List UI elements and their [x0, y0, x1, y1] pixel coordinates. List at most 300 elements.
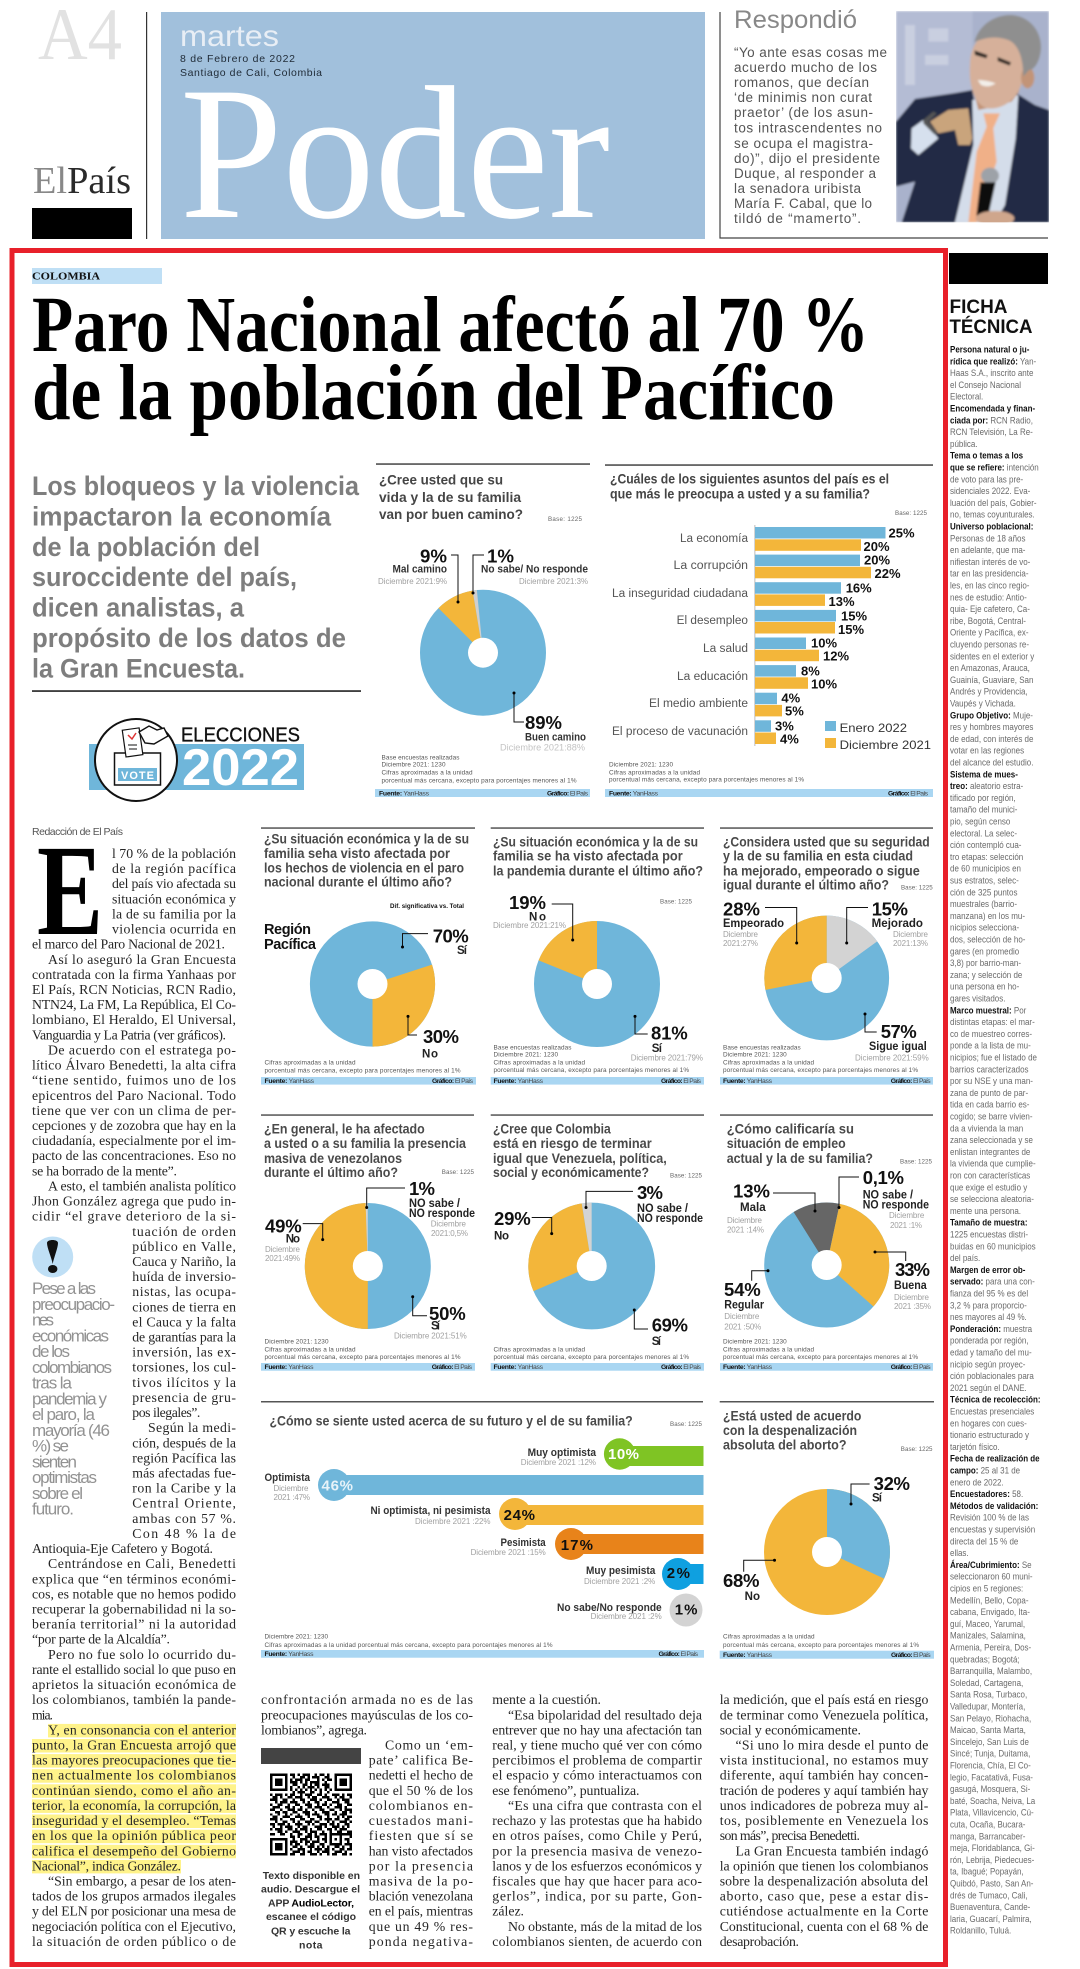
- black block right: [949, 253, 1048, 284]
- text block: ficha técnica details: 1225 encuestas distri-: [950, 1229, 1028, 1240]
- article column 3: entrever que no hay una afectación tan: [492, 1722, 702, 1737]
- red frame: [12, 250, 946, 1964]
- chart: venezolanos: [261, 1114, 475, 1371]
- text block: ficha técnica details: Andrés y Providencia,: [950, 686, 1028, 697]
- text block: ficha técnica details: tarjetón físico.: [950, 1441, 1000, 1452]
- text block: ficha técnica details: edad y tamaño del mu-: [950, 1347, 1032, 1358]
- article column 1: se ha borrado de la mente”.: [32, 1163, 177, 1178]
- chart: pandemia: Gráfico: El País: [661, 1078, 702, 1085]
- headline: Paro Nacional afectó al 70 %: [32, 282, 869, 369]
- text block: ficha técnica details: tamaño del munici-: [950, 804, 1018, 815]
- panel: Respondió quote: praetor’ (de los asun-: [734, 105, 873, 120]
- value labels: 15%: [841, 609, 867, 624]
- chart: venezolanos: Cifras aproximadas a la unidad: [264, 1347, 356, 1354]
- text block: ficha técnica details: Buenaventura, Cande-: [950, 1902, 1030, 1912]
- value labels: 12%: [823, 649, 849, 664]
- chart: pandemia: Fuente: YanHass: [494, 1078, 544, 1085]
- article column 4: la medición, que el país está en riesgo: [720, 1692, 928, 1707]
- chart: venezolanos: 1%: [409, 1178, 435, 1199]
- panel: Respondió quote: María F. Cabal, que lo: [734, 196, 872, 211]
- article column 4: son más”, precisa Benedetti.: [720, 1828, 860, 1843]
- chart: empleo: Cifras aproximadas a la unidad: [723, 1347, 814, 1354]
- heading: Ficha técnica: TÉCNICA: [950, 316, 1033, 338]
- callout: exclamation icon: [32, 1236, 73, 1278]
- article column 3: ese fenómeno”, puntualiza.: [492, 1783, 640, 1798]
- text block: ficha técnica details: de voto para las pre-: [950, 474, 1023, 484]
- bar: optimista: Diciembre: [274, 1484, 309, 1493]
- chart: seguridad: porcentual más cercana, excepto para porcentajes menores al 1%: [723, 1067, 918, 1074]
- article column 1: nistas, las ocupa-: [132, 1284, 236, 1299]
- article column 1: más afectadas fue-: [132, 1466, 236, 1480]
- article column 1: Nacional”, indica González.: [32, 1858, 181, 1873]
- chart: empleo: 13%: [733, 1180, 770, 1202]
- chart: futuro lollipop bars: Diciembre 2021: 1230: [264, 1634, 328, 1641]
- text block: ficha técnica details: Revisión 100 % de las: [950, 1512, 1030, 1523]
- text block: ficha técnica details: en Amazonas, Arauca,: [950, 663, 1030, 673]
- article column 3: rechazo y las protestas que ha habido: [492, 1813, 702, 1828]
- text block: ficha técnica details: Técnica de recolección:: [950, 1394, 1041, 1405]
- audio note under QR: escanee el código: [266, 1911, 356, 1923]
- article column 1: presencia de gru-: [132, 1390, 236, 1405]
- chart: riesgo Venezuela: NO sabe /: [637, 1203, 689, 1215]
- value labels: 10%: [811, 636, 837, 651]
- chart: buen camino pie: Fuente: YanHass: [379, 790, 430, 798]
- bar: no sabe: No sabe/No responde: [557, 1602, 662, 1614]
- chart: despenalización aborto: 32%: [874, 1473, 910, 1494]
- article column 1: lombiano, El Heraldo, El Universal,: [32, 1012, 236, 1027]
- question: con la despenalización: [723, 1423, 857, 1438]
- article column 1: beranía territorial” ni la autoridad: [32, 1617, 236, 1632]
- callout text: %) se: [32, 1436, 69, 1456]
- text block: ficha técnica details: legio, Facatativá, Fusa-: [950, 1772, 1033, 1782]
- callout text: preocupacio-: [32, 1295, 115, 1314]
- article column 2: que un 49 % res-: [369, 1919, 473, 1934]
- text block: ficha técnica details: guí, Maceo, Yarumal,: [950, 1618, 1025, 1629]
- chart: buen camino pie: Mal camino: [392, 564, 447, 576]
- text block: ficha técnica details: Medellín, Bello, Copa-: [950, 1595, 1029, 1605]
- text block: ficha técnica details: Quibdó, Pasto, San An-: [950, 1878, 1034, 1889]
- chart: pandemia: Diciembre 2021:21%: [493, 921, 566, 930]
- text block: ficha técnica details: cuta, Ocaña, Bucara-: [950, 1819, 1026, 1830]
- callout text: tras la: [32, 1374, 73, 1392]
- chart: futuro lollipop bars: Cifras aproximadas a la unidad porcentual más cercana, excepto para porcentajes menores al 1%: [264, 1642, 553, 1649]
- drop cap E: E: [37, 819, 103, 963]
- article column 3: “Es una cifra que contrasta con el: [508, 1798, 702, 1813]
- chart: asuntos bar chart: Diciembre 2021: 1230: [609, 762, 673, 769]
- article column 1: El País, RCN Noticias, RCN Radio,: [32, 982, 236, 997]
- bar: ni optimista ni pesimista: [370, 1498, 704, 1530]
- bar: muy pesimista: Diciembre 2021 :2%: [584, 1577, 655, 1586]
- question: actual y la de su familia?: [727, 1151, 873, 1166]
- article column 1: situación económica y: [112, 891, 236, 906]
- chart: empleo: 54%: [724, 1279, 761, 1300]
- text block: ficha técnica details: ta, Ibagué; Popayán,: [950, 1866, 1024, 1877]
- value labels: 10%: [811, 677, 837, 692]
- article column 1: explica que “en términos económi-: [32, 1571, 236, 1586]
- category labels: [612, 533, 749, 738]
- bar: muy optimista: [521, 1438, 704, 1470]
- article column 1: contratada con la firma Yanhaas por: [32, 967, 236, 982]
- text block: ficha técnica details: San Pelayo, Riohacha,: [950, 1713, 1031, 1723]
- article column 4: vista institucional, no estamos muy: [720, 1753, 928, 1768]
- chart: riesgo Venezuela: Fuente: YanHass: [494, 1364, 544, 1371]
- value labels: 22%: [874, 566, 901, 581]
- callout text: pandemia y: [32, 1389, 108, 1408]
- chart: asuntos bar chart: [605, 464, 933, 798]
- text block: ficha técnica details: laria, Guacarí, Palmira,: [950, 1913, 1032, 1924]
- text block: ficha técnica details: Persona natural o ju-: [950, 344, 1030, 355]
- text block: ficha técnica details: manga, Barrancaber-: [950, 1831, 1026, 1841]
- chart: empleo: [720, 1114, 933, 1371]
- article column 1: Con 48 % la de: [132, 1526, 236, 1541]
- question: está en riesgo de terminar: [493, 1136, 652, 1151]
- chart: empleo: porcentual más cercana, excepto para porcentajes menores al 1%: [723, 1354, 918, 1361]
- text block: ficha técnica details: rídica que realizó: Yan-: [950, 356, 1036, 366]
- text block: ficha técnica details: Métodos de validación:: [950, 1500, 1038, 1511]
- pie: [333, 945, 412, 1023]
- text block: ficha técnica details: meja, Floridablanca, Gi-: [950, 1843, 1035, 1853]
- QR code: [270, 1774, 352, 1856]
- subheading: impactaron la economía: [32, 501, 332, 531]
- article column 2: lombianos”, agrega.: [261, 1722, 367, 1737]
- chart: empleo: 2021 :14%: [727, 1225, 764, 1234]
- chart: pandemia: porcentual más cercana, excepto para porcentajes menores al 1%: [494, 1067, 689, 1074]
- text block: ficha técnica details: sidentes en el exterior y: [950, 651, 1035, 661]
- text block: ficha técnica details: Personas de 18 años: [950, 533, 1026, 543]
- article column 4: de terminar como Venezuela política,: [720, 1707, 928, 1722]
- question: ¿Su situación económica y la de su: [493, 834, 698, 849]
- article column 1: terior, la economía, la corrupción, la: [32, 1798, 236, 1813]
- audio note under QR: Texto disponible en: [263, 1870, 360, 1882]
- question: ¿Considera usted que su seguridad: [723, 834, 930, 849]
- text block: ficha técnica details: Grupo Objetivo: Muje-: [950, 710, 1033, 720]
- chart: seguridad: Base: 1225: [901, 884, 933, 892]
- article column 1: la de su familia por la: [112, 906, 236, 921]
- text block: ficha técnica details: ción contempló cua-: [950, 840, 1022, 850]
- chart: seguridad: Empeorado: [723, 918, 784, 930]
- section banner: Poder: Poder: [180, 49, 610, 259]
- text block: ficha técnica details: Ponderación: muestra: [950, 1323, 1032, 1334]
- headline: [32, 282, 869, 437]
- article column 1: pos ilegales”.: [132, 1405, 200, 1420]
- chart: buen camino pie: Cifras aproximadas a la unidad: [382, 770, 473, 777]
- chart: buen camino pie: porcentual más cercana, excepto para porcentajes menores al 1%: [382, 778, 577, 785]
- text block: ficha técnica details: tificado por región,: [950, 792, 1016, 803]
- chart: venezolanos: NO sabe /: [409, 1198, 461, 1210]
- chart: pandemia: Diciembre 2021: 1230: [494, 1052, 558, 1059]
- article column 1: epicentros del Paro Nacional. Todo: [32, 1088, 236, 1103]
- question: [264, 832, 469, 889]
- bar: muy pesimista: [584, 1558, 704, 1590]
- value labels: 13%: [828, 594, 855, 609]
- section banner: Poder: Santiago de Cali, Colombia: [180, 67, 322, 79]
- text block: ficha técnica details: sidenciales 2022. Eva-: [950, 486, 1030, 496]
- text block: ficha técnica details: que exige el estudio y: [950, 1182, 1028, 1192]
- text block: ficha técnica details: quebradas; Bogotá;: [950, 1654, 1020, 1664]
- chart: despenalización aborto: [720, 1401, 934, 1659]
- article column 3: el espacio y cómo interactuamos con: [492, 1768, 702, 1783]
- chart: despenalización aborto: Cifras aproximadas a la unidad: [723, 1634, 815, 1641]
- chart: seguridad: Diciembre: [723, 930, 759, 939]
- article column 1: rante el estallido social lo que puso en: [32, 1662, 236, 1677]
- article column 1: Así lo aseguró la Gran Encuesta: [48, 952, 236, 967]
- text block: ficha técnica details: Roldanillo, Tuluá.: [950, 1925, 1011, 1936]
- chart: futuro lollipop bars: Gráfico: El País: [658, 1651, 699, 1658]
- chart: futuro lollipop bars: [261, 1401, 704, 1658]
- text block: ficha técnica details: Área/Cubrimiento: Se: [950, 1559, 1032, 1570]
- text block: ficha técnica details: nes mayores al 49 %.: [950, 1312, 1027, 1322]
- article column 1: tivos ilícitos y la: [132, 1375, 236, 1390]
- chart: empleo: NO responde: [863, 1200, 929, 1212]
- pie: [550, 1224, 633, 1308]
- text block: ficha técnica details: ellas.: [950, 1548, 969, 1558]
- article column 2: nedetti el hecho de: [369, 1768, 473, 1783]
- article column 3: mente a la cuestión.: [492, 1692, 601, 1707]
- chart: asuntos bar chart: Cifras aproximadas a la unidad: [609, 770, 700, 777]
- article column 3: en otros países, como Chile y Perú,: [492, 1828, 702, 1843]
- chart: seguridad: 2021:13%: [893, 939, 928, 948]
- bar: pesimista: 17%: [561, 1537, 593, 1554]
- article column 4: sobre la despenalización absoluta del: [720, 1874, 929, 1888]
- panel: Respondió quote: ‘de minimis non curat: [734, 90, 872, 105]
- text block: ficha técnica details: Sistema de mues-: [950, 769, 1018, 779]
- chart: empleo: Mala: [740, 1202, 766, 1214]
- text block: ficha técnica details: se selecciona aleatoria-: [950, 1194, 1034, 1204]
- text block: ficha técnica details: no, temas coyunturales.: [950, 509, 1035, 520]
- article column 4: social y económicamente.: [720, 1722, 861, 1737]
- article column 1: “por parte de la Alcaldía”.: [32, 1632, 170, 1647]
- article column 1: y del ELN por posicionar una mesa de: [32, 1904, 236, 1919]
- text block: ficha técnica details: nes de estudio: Antio-: [950, 592, 1027, 602]
- article column 2: colombianos en-: [369, 1798, 473, 1813]
- text block: ficha técnica details: ción poblacionales para: [950, 1371, 1034, 1381]
- audio note under QR: [261, 1870, 360, 1951]
- text block: ficha técnica details: Sincelejo, San Luis de: [950, 1736, 1029, 1747]
- bar: muy optimista: Muy optimista: [528, 1447, 597, 1459]
- text block: ficha técnica details: zana seleccionada y se: [950, 1135, 1033, 1145]
- chart: despenalización aborto: Sí: [872, 1493, 883, 1505]
- chart: riesgo Venezuela: 3%: [637, 1182, 663, 1203]
- article column 1: Centrándose en Cali, Benedetti: [48, 1556, 236, 1571]
- text block: ficha técnica details: cogido; se barre vivien-: [950, 1111, 1033, 1122]
- text block: ficha técnica details: de 60 municipios en: [950, 863, 1021, 874]
- bar: pesimista: [471, 1528, 704, 1560]
- question: masiva de venezolanos: [264, 1151, 402, 1166]
- value labels: 25%: [888, 526, 915, 541]
- bar: muy optimista: 10%: [608, 1446, 639, 1463]
- text block: ficha técnica details: gares visitados.: [950, 993, 1005, 1004]
- legend: Enero 2022: [840, 721, 907, 735]
- chart: empleo: Base: 1225: [900, 1158, 933, 1166]
- question: y la de su familia en esta ciudad: [723, 849, 913, 864]
- question: [379, 472, 523, 522]
- value labels: 8%: [801, 664, 820, 679]
- callout text: [32, 1279, 115, 1518]
- pie: [438, 608, 528, 697]
- pie: [784, 1222, 870, 1308]
- text block: ficha técnica details: Valledupar, Montería,: [950, 1701, 1025, 1712]
- text block: ficha técnica details: drés de Tumaco, Cali,: [950, 1890, 1028, 1900]
- text block: ficha técnica details: nicipios selecciona-: [950, 922, 1019, 933]
- bar: optimista: 46%: [322, 1478, 353, 1495]
- question: situación de empleo: [727, 1136, 846, 1151]
- text block: ficha técnica details: Encuestadores: 58.: [950, 1489, 1023, 1499]
- text block: ficha técnica details: tida en cada barrio es-: [950, 1099, 1030, 1110]
- question: a usted o a su familia la presencia: [264, 1136, 467, 1151]
- logo: Elecciones 2022: [89, 719, 304, 801]
- blue bars: [755, 527, 886, 732]
- article column 4: unos indicadores de pobreza muy al-: [720, 1798, 929, 1813]
- bar: ni optimista ni pesimista: Diciembre 2021 :22%: [415, 1517, 490, 1526]
- chart: seguridad: 28%: [723, 899, 760, 920]
- callout text: económicas: [32, 1326, 109, 1345]
- text block: ficha técnica details: nicipios; fue el listado de: [950, 1052, 1037, 1063]
- chart: empleo: Diciembre: [889, 1211, 925, 1220]
- chart: buen camino pie: Diciembre 2021:9%: [378, 577, 447, 586]
- chart: pandemia: Base encuestas realizadas: [494, 1044, 572, 1052]
- pie: [335, 1233, 400, 1299]
- subheading: suroccidente del país,: [32, 562, 297, 592]
- text block: ficha técnica details: Tamaño de muestra:: [950, 1217, 1028, 1228]
- text block: ficha técnica details: tro etapas: selección: [950, 851, 1023, 862]
- article column 1: la situación de orden público o de: [32, 1934, 236, 1949]
- panel: Respondió quote: la senadora uribista: [734, 181, 861, 196]
- callout text: futuro.: [32, 1500, 74, 1518]
- chart: venezolanos: Diciembre: [265, 1245, 301, 1254]
- chart: seguridad: Sigue igual: [869, 1041, 927, 1053]
- article column 4: tración de poderes y aquí también hay: [720, 1783, 928, 1798]
- text block: ficha técnica details: en hogares con cues-: [950, 1418, 1027, 1428]
- chart: seguridad: Diciembre: [893, 930, 929, 939]
- text block: ficha técnica details: ribe, Bogotá, Central-: [950, 615, 1026, 626]
- chart: asuntos bar chart: porcentual más cercana, excepto para porcentajes menores al 1%: [609, 777, 804, 784]
- chart: buen camino pie: Buen camino: [525, 732, 586, 744]
- chart: empleo: Regular: [724, 1300, 764, 1312]
- article column 1: público en Valle,: [132, 1239, 236, 1254]
- article column 2: masiva de la po-: [369, 1874, 473, 1888]
- text block: ficha técnica details: gares (en promedio: [950, 946, 1019, 956]
- callout text: optimistas: [32, 1468, 97, 1487]
- text block: ficha técnica details: gasugá, Mosquera, Si-: [950, 1784, 1030, 1794]
- category labels: La corrupción: [674, 560, 748, 572]
- chart: empleo: Gráfico: El País: [891, 1364, 931, 1371]
- chart: venezolanos: Diciembre 2021:51%: [394, 1332, 467, 1341]
- chart: buen camino pie: Diciembre 2021: 1230: [382, 762, 446, 769]
- chart: seguridad: Fuente: YanHass: [723, 1078, 773, 1085]
- chart: futuro lollipop bars: Base: 1225: [670, 1421, 703, 1428]
- article column 4: [720, 1692, 929, 1949]
- text block: ficha técnica details: co de muestreo corres-: [950, 1028, 1032, 1039]
- callout text: sobre el: [32, 1484, 83, 1503]
- chart: violencia paro: porcentual más cercana, excepto para porcentajes menores al 1%: [264, 1068, 461, 1075]
- text block: ficha técnica details: de edad, con interés de: [950, 733, 1034, 744]
- article column 1: el Cauca y la falta: [132, 1314, 236, 1329]
- chart: pandemia: Diciembre 2021:79%: [631, 1054, 703, 1063]
- article column 4: La Gran Encuesta también indagó: [736, 1843, 928, 1858]
- article column 3: gerlos”, indica, por su parte, Gon-: [492, 1889, 702, 1904]
- chart: pandemia: Cifras aproximadas a la unidad: [494, 1060, 585, 1066]
- text block: ficha técnica details: Encuestas presenciales: [950, 1406, 1035, 1417]
- chart: asuntos bar chart: Base: 1225: [895, 510, 928, 517]
- chart: violencia paro: Fuente: YanHass: [264, 1078, 315, 1085]
- chart: seguridad: Diciembre 2021:59%: [855, 1053, 929, 1062]
- text block: ficha técnica details: nicipio según proyec-: [950, 1359, 1026, 1369]
- text block: ficha técnica details: RCN Televisión, La Re-: [950, 427, 1033, 437]
- article column 1: el marco del Paro Nacional de 2021.: [32, 937, 225, 952]
- value labels: 5%: [785, 704, 804, 719]
- text block: ficha técnica details: mente una persona.: [950, 1205, 1021, 1216]
- article column 1: en los que la opinión pública peor: [32, 1828, 236, 1843]
- text block: ficha técnica details: nifiestan interés de vo-: [950, 556, 1030, 567]
- chart: violencia paro: 30%: [423, 1026, 459, 1047]
- pie: [790, 941, 863, 1015]
- chart: venezolanos: porcentual más cercana, excepto para porcentajes menores al 1%: [264, 1354, 461, 1361]
- chart: pandemia: Sí: [652, 1043, 663, 1055]
- article column 3: por la presencia masiva de venezo-: [492, 1843, 702, 1858]
- article column 3: No obstante, más de la mitad de los: [508, 1919, 702, 1934]
- black block: [32, 208, 132, 239]
- article column 1: aprietos la situación económica de: [32, 1677, 236, 1692]
- value labels: 3%: [775, 719, 794, 734]
- question: [264, 1122, 467, 1180]
- text block: ficha técnica details: pio, según censo: [950, 816, 1011, 827]
- chart: seguridad: Cifras aproximadas a la unidad: [723, 1060, 814, 1066]
- chart: buen camino pie: [375, 463, 590, 798]
- article column 1: NTN24, La FM, La República, El Co-: [32, 997, 236, 1012]
- category labels: La economía: [680, 533, 749, 545]
- article column 1: A esto, el también analista político: [48, 1178, 236, 1193]
- text block: ficha técnica details: Tema o temas a los: [950, 450, 1023, 461]
- article column 1: califica el desempeño del Gobierno: [32, 1843, 236, 1858]
- chart: despenalización aborto: porcentual más cercana, excepto para porcentajes menores al 1%: [723, 1642, 919, 1649]
- text block: ficha técnica details: res y hombres mayores: [950, 722, 1034, 732]
- panel: Respondió quote: romanos, que decían: [734, 75, 869, 90]
- panel: Respondió quote: tildó de “mamerto”.: [734, 211, 861, 226]
- article column 4: “Si uno lo mira desde el punto de: [736, 1738, 928, 1752]
- logo: Elecciones 2022: 2022: [182, 739, 299, 797]
- text block: ficha técnica details: quia- Eje cafetero, Ca-: [950, 604, 1030, 614]
- article column 1: cepciones y de zozobra que hay en la: [32, 1118, 236, 1133]
- chart: venezolanos: Gráfico: El País: [432, 1364, 473, 1371]
- chart: empleo: 33%: [895, 1259, 930, 1280]
- question: familia seha visto afectada por: [264, 846, 451, 861]
- bar: optimista: 2021 :47%: [274, 1493, 310, 1502]
- text block: ficha técnica details: una persona en ho-: [950, 981, 1019, 992]
- text block: ficha técnica details: por su NSE y una man-: [950, 1076, 1033, 1086]
- chart: riesgo Venezuela: Base: 1225: [670, 1172, 703, 1180]
- bar: muy optimista: Diciembre 2021 :12%: [521, 1458, 596, 1467]
- text block: ficha técnica details: baté, Soacha, Neiva, La: [950, 1795, 1035, 1806]
- article column 1: las mayores preocupaciones que tie-: [32, 1753, 236, 1768]
- text block: ficha técnica details: barrios caracterizados: [950, 1064, 1029, 1074]
- bar: no sabe: 1%: [675, 1602, 698, 1619]
- chart: empleo: 0,1%: [863, 1167, 904, 1188]
- chart: seguridad: Diciembre 2021: 1230: [723, 1052, 787, 1059]
- value labels: 20%: [864, 539, 890, 554]
- chart: riesgo Venezuela: NO responde: [637, 1213, 703, 1225]
- byline: Redacción de El País: [32, 826, 123, 838]
- chart: violencia paro: [261, 827, 476, 1085]
- chart: buen camino pie: Base encuestas realizadas: [382, 755, 460, 762]
- text block: ficha técnica details: buidas en 60 municipios: [950, 1241, 1036, 1251]
- article column 1: Según la medi-: [148, 1420, 236, 1435]
- chart: venezolanos: NO responde: [409, 1208, 475, 1220]
- text block: ficha técnica details: Soledad, Cartagena,: [950, 1677, 1023, 1688]
- dark bar above QR: [261, 1748, 361, 1764]
- chart: pandemia: 19%: [509, 892, 546, 913]
- question: ¿Cuáles de los siguientes asuntos del país es el: [610, 472, 889, 486]
- chart: empleo: Diciembre 2021: 1230: [723, 1338, 787, 1345]
